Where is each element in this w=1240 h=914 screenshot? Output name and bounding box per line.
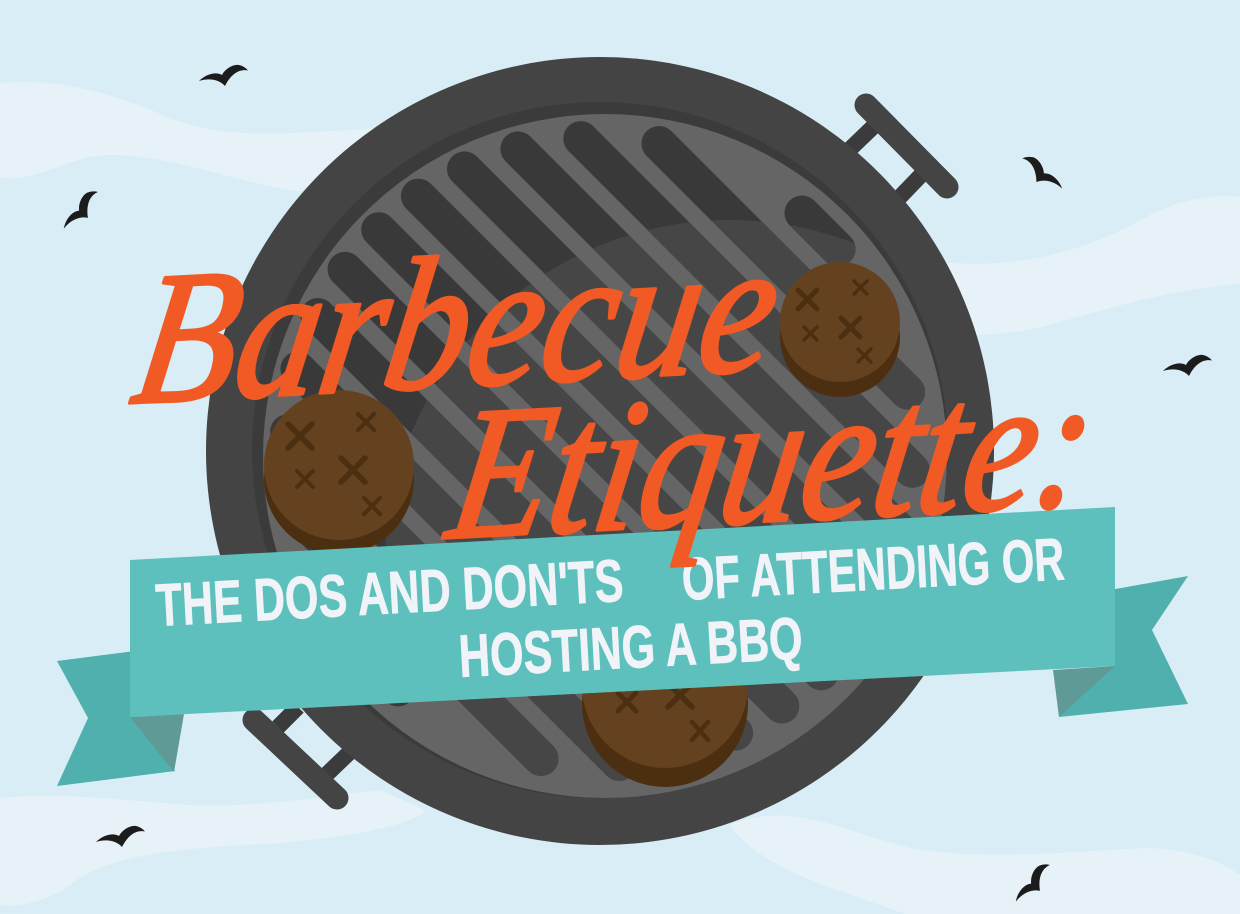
patty: left — [264, 390, 414, 554]
ribbon fold: left — [130, 714, 184, 772]
grill handle: top right — [848, 105, 947, 199]
patty: bottom — [582, 602, 748, 787]
cloud: top left — [0, 82, 380, 192]
cloud: bottom left — [0, 790, 425, 906]
grill handle: bottom left — [254, 707, 352, 798]
subtitle: line 1 left: THE DOS AND DON'TS — [154, 547, 625, 639]
title: Etiquette: Etiquette: — [435, 337, 1110, 580]
cloud: bottom right — [730, 815, 1240, 914]
grate base — [263, 114, 947, 798]
ribbon main band — [130, 507, 1115, 717]
grill body — [206, 57, 994, 845]
grill — [206, 57, 994, 845]
ribbon tail: right — [1059, 576, 1188, 717]
bird: upper left — [55, 187, 107, 233]
title: Barbecue: Barbecue — [121, 202, 794, 445]
ribbon fold: right — [1053, 666, 1115, 717]
patty: right — [780, 262, 900, 397]
ribbon tail: left — [57, 651, 175, 786]
lit area of grate bars — [386, 220, 930, 780]
bird: top centre — [199, 65, 248, 86]
bird: right — [1163, 355, 1212, 376]
subtitle: line 2: HOSTING A BBQ — [457, 605, 804, 690]
bird: lower left — [96, 826, 145, 847]
cloud: right — [940, 196, 1240, 335]
bird: upper right — [1016, 153, 1069, 193]
grate bars — [288, 139, 912, 763]
ribbon banner — [57, 507, 1188, 786]
grill inner rim — [252, 102, 948, 798]
subtitle: line 1 right: OF ATTENDING OR — [680, 525, 1066, 613]
bird: lower right — [1007, 860, 1059, 906]
